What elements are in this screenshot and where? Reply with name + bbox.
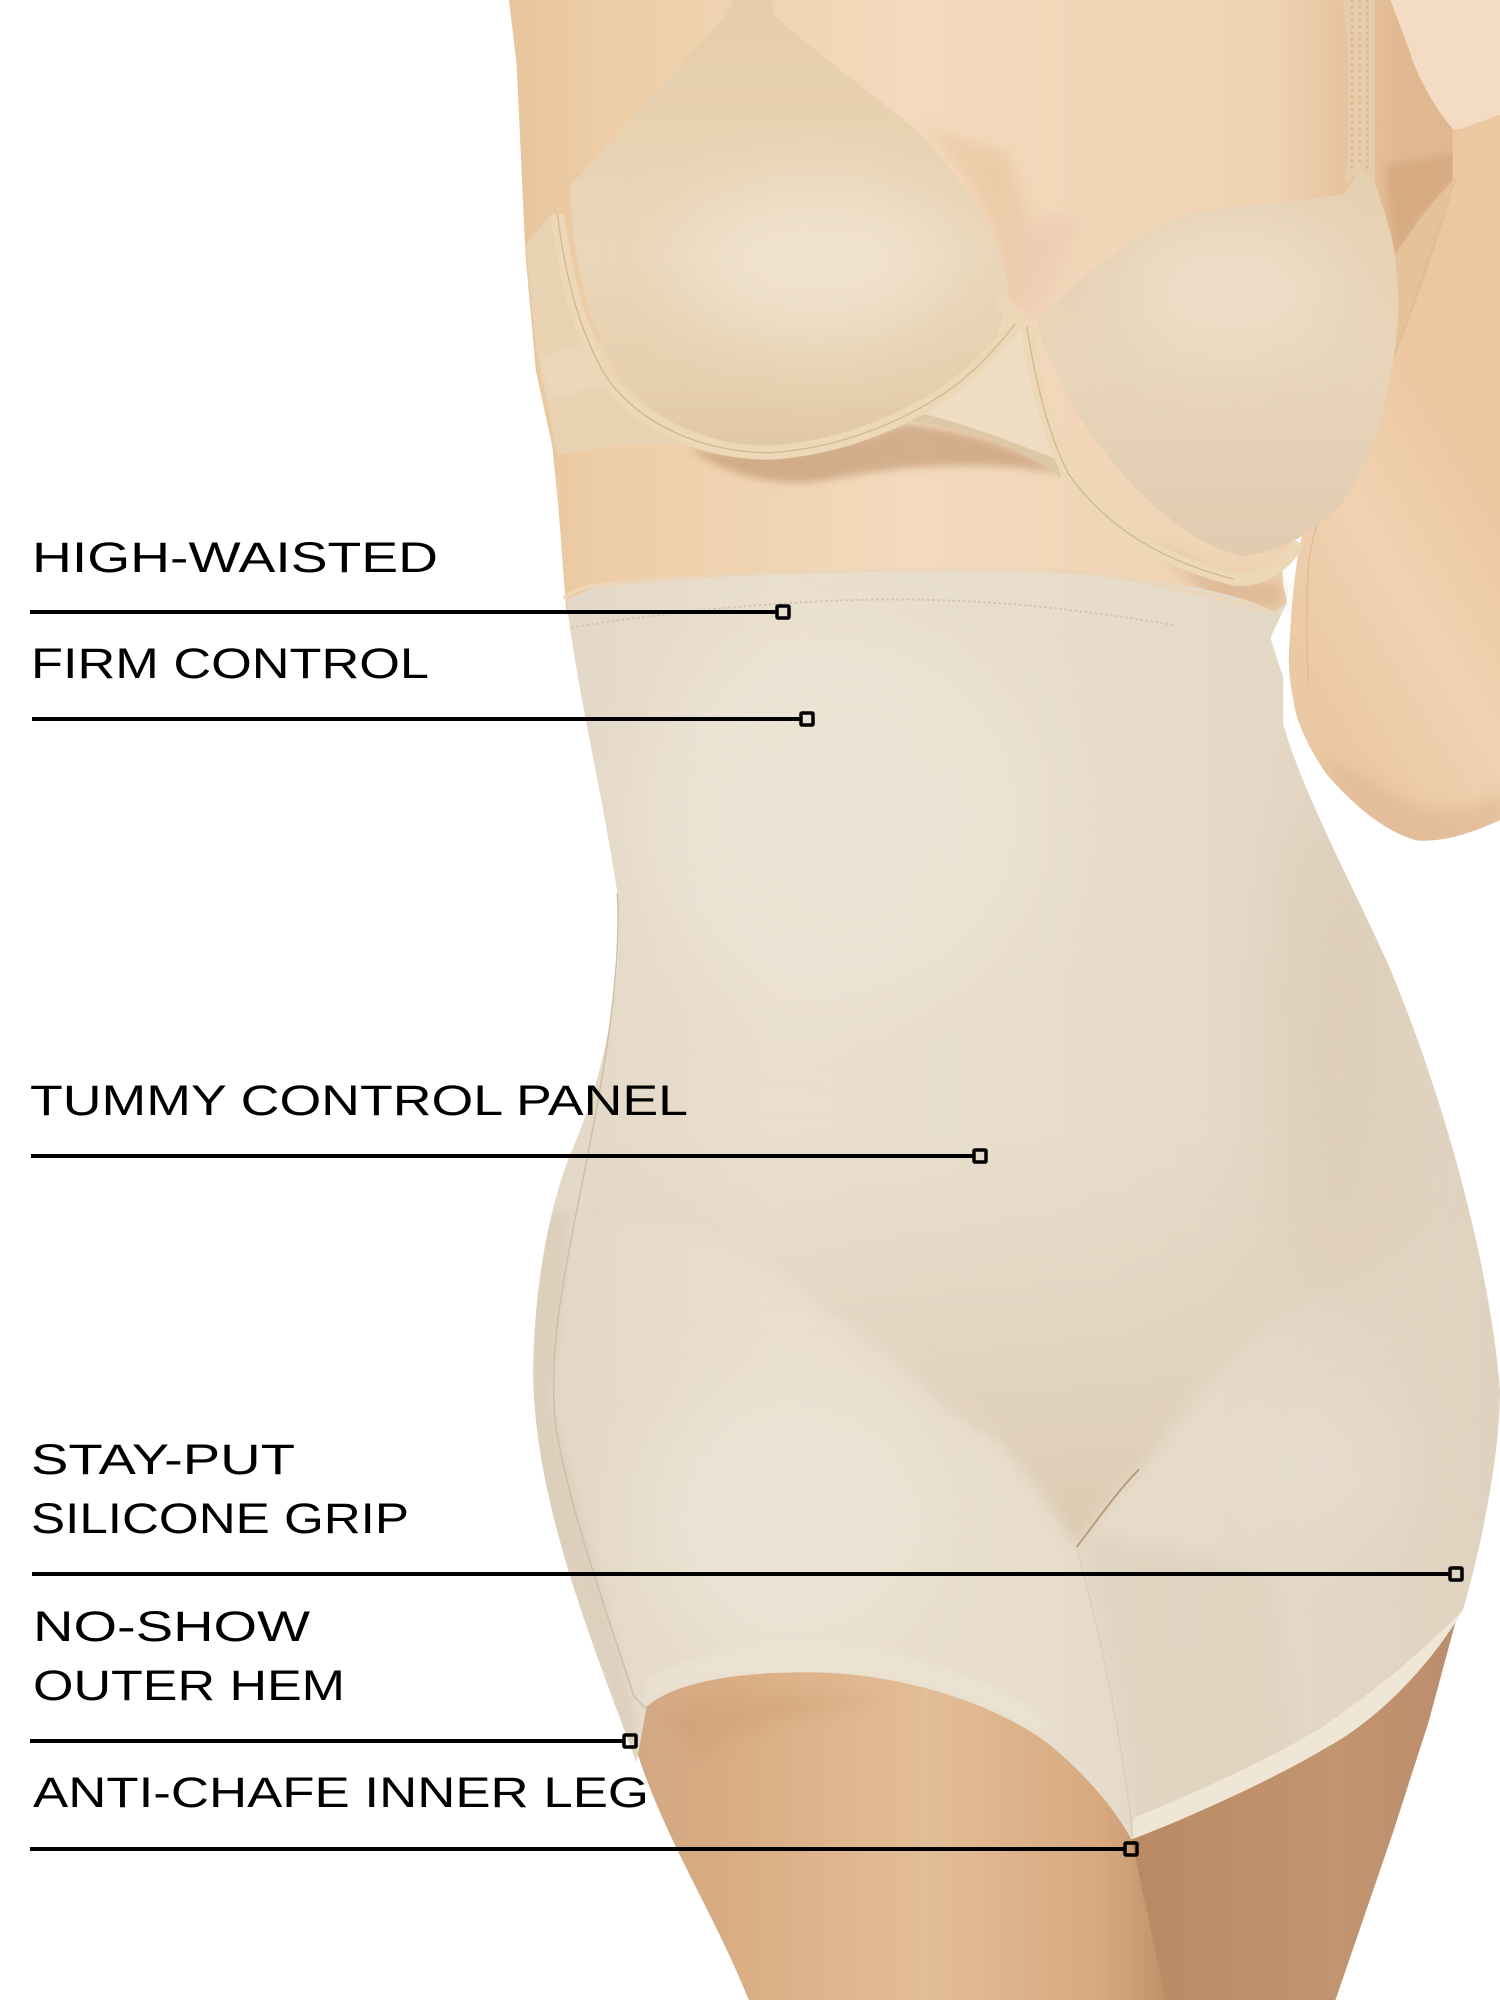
right cup highlight [1122, 223, 1339, 351]
marker [1450, 1568, 1462, 1580]
left outer panel shade [533, 1214, 634, 1741]
bra right cup [1020, 166, 1403, 561]
bra right underwire [1027, 327, 1298, 579]
marker [801, 713, 813, 725]
shapewear shading [533, 838, 1462, 1839]
leader line [32, 1572, 1450, 1576]
left leg [636, 1645, 1166, 2000]
label: SILICONE GRIP [31, 1495, 409, 1543]
label: FIRM CONTROL [31, 640, 429, 688]
label: TUMMY CONTROL PANEL [30, 1077, 688, 1125]
right side shade [1292, 838, 1392, 1182]
marker [1125, 1843, 1137, 1855]
callout: stay-put silicone grip [31, 1436, 1462, 1580]
waistband edge [564, 569, 1272, 612]
leader line [31, 1154, 974, 1158]
label: STAY-PUT [31, 1436, 295, 1484]
hand [1390, 0, 1500, 129]
armpit shadow [1384, 153, 1454, 255]
centre tummy panel [782, 1260, 1238, 1543]
right thigh light [1224, 1390, 1403, 1543]
right underwire stitching [1027, 327, 1233, 579]
label [33, 1603, 345, 1710]
arm and hand [1276, 0, 1500, 855]
shapewear body [533, 570, 1500, 1839]
waist shadow [1148, 536, 1282, 610]
leader line [32, 717, 801, 721]
leader line [30, 1739, 624, 1743]
bra strap [1343, 0, 1375, 185]
label: ANTI-CHAFE INNER LEG [33, 1769, 649, 1817]
under-bust shadow [689, 423, 1061, 483]
label: NO-SHOW [33, 1603, 311, 1651]
side seam [554, 893, 647, 1709]
bra band left [526, 212, 714, 455]
hem left band [647, 1642, 1052, 1737]
strap texture [1352, 0, 1367, 172]
gore shading [908, 415, 1061, 478]
top light [638, 625, 1046, 1008]
leg shadow [663, 1696, 893, 1760]
label [31, 1436, 409, 1543]
left cup highlight [682, 185, 950, 338]
torso skin [509, 0, 1467, 638]
leader line [30, 1847, 1125, 1851]
label: HIGH-WAISTED [32, 534, 438, 582]
model photo [509, 0, 1500, 2000]
callout: no-show outer hem [30, 1603, 636, 1747]
bra centre gore [908, 327, 1061, 478]
arm inner fold line [1307, 179, 1455, 682]
right leg [1131, 1594, 1463, 2000]
label: OUTER HEM [33, 1662, 345, 1710]
band fold [541, 344, 619, 402]
crotch crease [1077, 1469, 1139, 1547]
cleavage blush [1001, 217, 1084, 319]
marker [624, 1735, 636, 1747]
elbow shading [1332, 768, 1500, 841]
bra left cup [561, 0, 1020, 459]
left underwire stitching [557, 214, 1015, 453]
callout: high-waisted [30, 534, 789, 618]
marker [777, 606, 789, 618]
callout: anti-chafe inner leg [30, 1769, 1137, 1855]
right of crease [1092, 1543, 1209, 1814]
bra left underwire [557, 214, 1015, 453]
inner thigh line [1077, 1547, 1133, 1837]
leader line [30, 610, 777, 614]
side fold [1304, 179, 1455, 528]
right leg hem band [1131, 1610, 1463, 1839]
left thigh light [638, 1390, 944, 1645]
cleavage shading [925, 128, 1027, 306]
callout: tummy control panel [30, 1077, 986, 1162]
marker [974, 1150, 986, 1162]
waistband stitching [571, 599, 1173, 628]
callout: firm control [31, 640, 813, 725]
